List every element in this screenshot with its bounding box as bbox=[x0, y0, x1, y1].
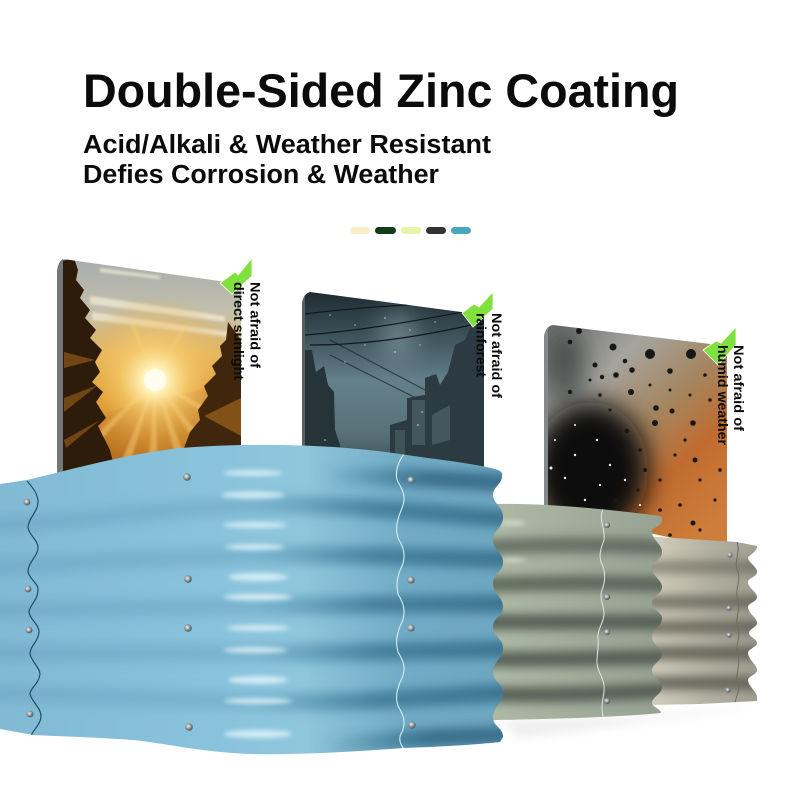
subtitle bbox=[83, 131, 492, 189]
panel: rain card bbox=[300, 290, 486, 472]
dark seam bbox=[27, 481, 41, 736]
card edge bbox=[544, 328, 548, 513]
panel: green planter bbox=[493, 504, 662, 720]
label: not afraid of rainforest: rainforest bbox=[474, 313, 490, 377]
corrugation shading bbox=[0, 505, 530, 702]
rivets bbox=[24, 473, 416, 731]
label: not afraid of direct sunlight: Not afraid of bbox=[248, 282, 264, 368]
power lines bbox=[305, 304, 472, 397]
buildings right bbox=[390, 318, 484, 470]
rivets bbox=[604, 522, 610, 704]
panel: blue planter bbox=[0, 440, 530, 760]
icon: check mark, rain bbox=[462, 292, 493, 327]
label: not afraid of humid weather bbox=[715, 345, 747, 446]
milky glow bbox=[382, 309, 414, 361]
sun rays bbox=[100, 326, 202, 458]
icon: check mark, humid bbox=[703, 327, 736, 365]
right tree bbox=[184, 322, 241, 448]
card edge bbox=[302, 296, 305, 446]
panel: sunlight card bbox=[55, 255, 245, 477]
panel: grey planter bbox=[652, 537, 758, 705]
panel: humid weather card bbox=[544, 325, 727, 542]
ground shadow bbox=[500, 703, 770, 738]
distant hills bbox=[98, 388, 208, 460]
label: not afraid of direct sunlight: direct sunlight bbox=[231, 282, 247, 380]
buildings left bbox=[305, 350, 340, 448]
icon: check mark, sunlight bbox=[220, 258, 252, 294]
subtitle: Acid/Alkali & Weather Resistant bbox=[83, 131, 492, 159]
label: not afraid of rainforest: Not afraid of bbox=[489, 313, 505, 398]
colour swatches bbox=[350, 227, 471, 234]
subtitle: Defies Corrosion & Weather bbox=[83, 161, 439, 189]
label: not afraid of humid weather: Not afraid of bbox=[731, 345, 747, 431]
water drops bbox=[568, 328, 722, 537]
specular highlights bbox=[221, 470, 292, 738]
light seam bbox=[396, 454, 404, 749]
left tree bbox=[57, 258, 113, 476]
label: not afraid of direct sunlight bbox=[231, 282, 264, 380]
rain specks bbox=[324, 314, 436, 441]
title: Double-Sided Zinc Coating bbox=[83, 64, 679, 117]
rivets bbox=[725, 552, 733, 693]
sun bbox=[92, 300, 222, 454]
label: not afraid of humid weather: humid weather bbox=[715, 345, 731, 446]
card edge bbox=[57, 258, 63, 476]
label: not afraid of rainforest bbox=[474, 313, 505, 398]
